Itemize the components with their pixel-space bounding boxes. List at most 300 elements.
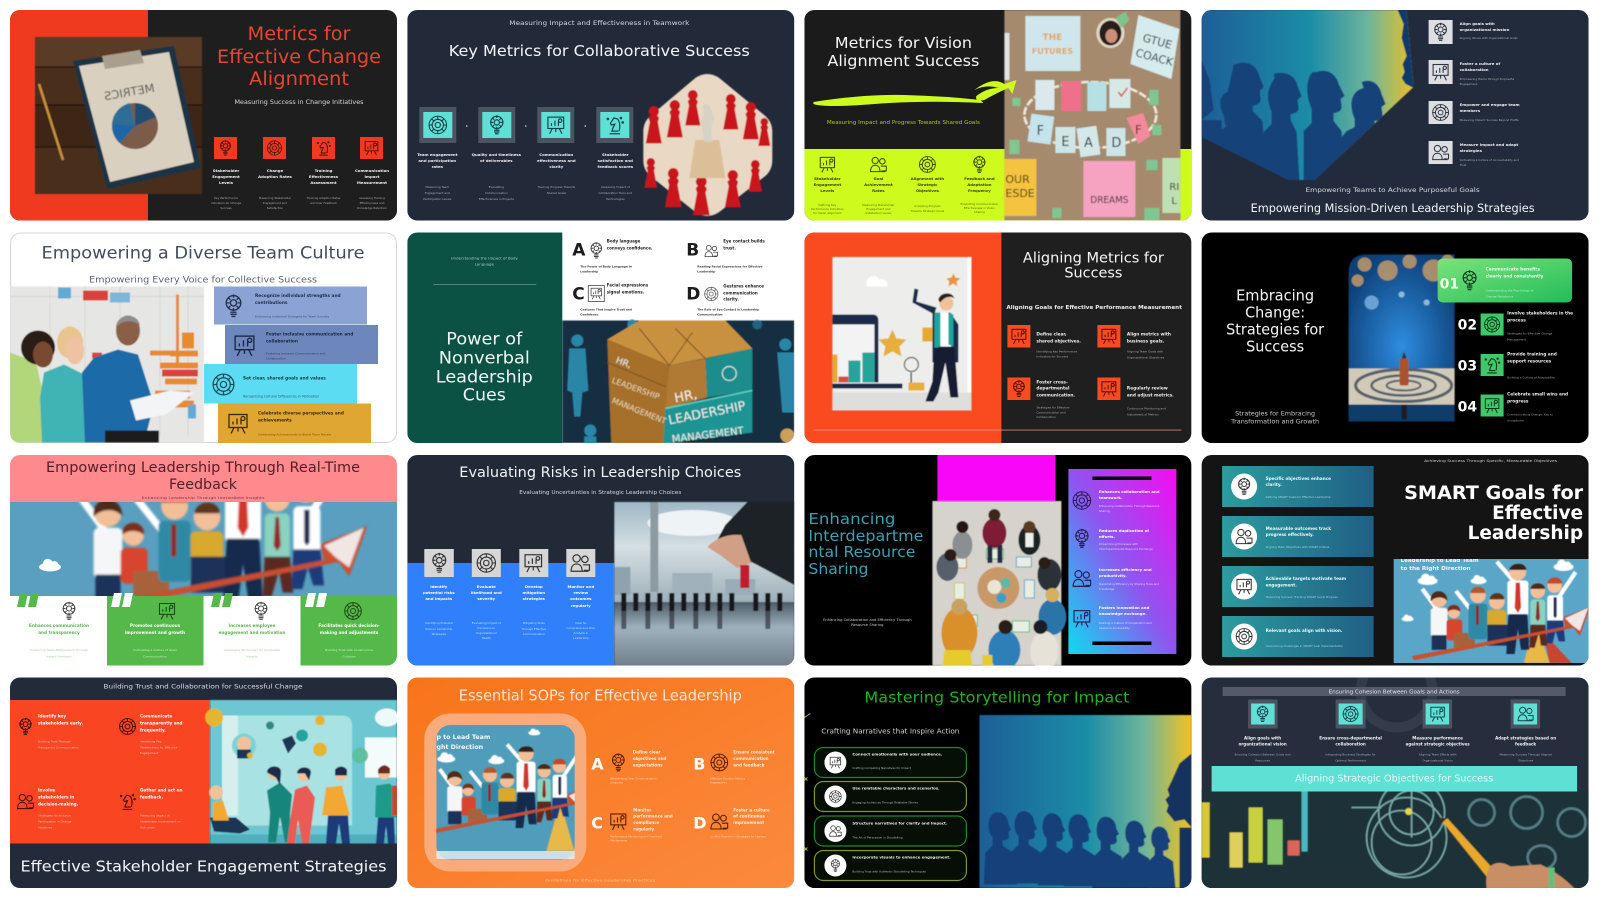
metric labels: Feedback and — [964, 176, 995, 181]
framed illustration: ight Direction — [434, 744, 483, 751]
step 04: Acceptance — [1507, 418, 1524, 422]
SOP C — [591, 808, 673, 842]
framed illustration: ip to Lead Team — [434, 734, 491, 741]
title — [437, 332, 532, 400]
step 04: 04 — [1458, 400, 1477, 416]
item headings: members — [1460, 108, 1481, 113]
step descriptions: Risks in Leadership — [425, 627, 452, 631]
step: communication — [225, 325, 378, 364]
step: strengths: Recognize individual strengths and — [255, 293, 341, 299]
SOP B: Frameworks — [710, 780, 727, 784]
gradient panel with benefits: Enhances collaboration and — [1099, 489, 1160, 494]
feedback column 3 — [204, 593, 300, 666]
goal card: achievable: Achievable targets motivate team — [1266, 576, 1347, 581]
panel: Effective Stakeholder Engagement Strategies — [10, 678, 399, 888]
icon tiles — [424, 549, 595, 577]
title: Effective Change — [217, 47, 381, 68]
gradient panel with benefits: knowledge exchange. — [1099, 611, 1147, 616]
metric icons — [419, 107, 633, 143]
step 02: 02 — [1458, 318, 1477, 334]
metric descriptions: Engagement and — [263, 201, 287, 205]
photo: HR leadership cubes: MANAGEMENT — [671, 426, 745, 445]
story pill 1: Crafting Compelling Narratives for Impact — [852, 766, 912, 770]
feedback column 3: Increases employee — [229, 623, 276, 628]
panel: Empowering Leadership Through Real-Time Feedback — [10, 449, 398, 666]
metric labels: Impact — [364, 174, 380, 179]
step descriptions: Organizational — [476, 631, 497, 635]
title: Power of — [446, 330, 523, 350]
gradient panel with benefits: Maximizing Efficiency by Sharing Tools and — [1099, 582, 1159, 586]
objective labels: against strategic objectives — [1405, 742, 1470, 746]
item: review metrics: and adjust metrics. — [1127, 392, 1174, 398]
SOP D: Conflict Resolution Strategies for Leaders — [710, 834, 767, 838]
metric icons — [820, 156, 985, 172]
metric descriptions: Technologies — [605, 197, 625, 201]
metric descriptions: Assessing Impact of — [601, 185, 631, 189]
title: Success — [1064, 266, 1122, 282]
subheading: Aligning Goals for Effective Performance Measurement — [1006, 305, 1183, 311]
step: shared goals: Recognizing Cultural Differences in Motivation — [243, 394, 319, 398]
step 04: Communicating Change: Key to — [1507, 412, 1553, 416]
title: Essential SOPs for Effective Leadership — [459, 686, 742, 704]
metric labels: Objectives — [916, 188, 940, 193]
SOP D: D — [693, 814, 707, 832]
metric descriptions: Key Performance — [214, 196, 238, 200]
metric labels: Frequency — [968, 188, 991, 193]
step descriptions: Comprehensive Risk — [567, 626, 595, 630]
panel: Key Metrics for Collaborative Success — [407, 10, 794, 220]
title — [46, 460, 360, 493]
subtitle bar — [1223, 687, 1566, 696]
item: review metrics: Regularly review — [1127, 386, 1168, 392]
item B: Reading Facial Expressions for Effective — [697, 264, 762, 268]
step labels: potential risks — [423, 590, 455, 595]
step labels — [423, 584, 594, 608]
objective descriptions: Optimal Performance — [1335, 758, 1366, 762]
item B — [686, 238, 765, 274]
step descriptions — [425, 621, 595, 640]
SOP C: compliance — [633, 820, 660, 825]
step 02 — [1458, 310, 1573, 342]
metric descriptions: Measuring Stakeholder — [259, 196, 292, 200]
gradient panel with benefits: Streamlining Processes with — [1099, 542, 1138, 546]
gradient panel with benefits: Resource Accessibility — [1099, 626, 1130, 630]
story pill 4 — [814, 850, 966, 880]
photo: cork board with sticky notes: COACK — [1134, 46, 1175, 69]
panel: Mastering Storytelling for Impact — [804, 678, 1192, 888]
item: cross-departmental: Collaboration — [1036, 415, 1056, 419]
metric descriptions: and User Feedback — [310, 201, 337, 205]
objective labels: collaboration — [1335, 742, 1366, 746]
title: Alignment — [249, 69, 349, 90]
item C — [572, 282, 649, 316]
metric labels: Goal — [873, 176, 883, 181]
item headings: Empower and engage team — [1460, 102, 1520, 107]
metric labels: Stakeholder — [213, 168, 239, 173]
photo: cork board with sticky notes: FUTURES — [1032, 47, 1073, 56]
metric descriptions: Towards Strategic Goals — [910, 209, 945, 213]
metric labels: and participation — [418, 158, 456, 163]
title — [828, 36, 979, 69]
metric labels: rates — [432, 164, 444, 169]
item: cross-departmental — [1007, 378, 1075, 419]
item: involve stakeholders: Participation in Change — [38, 820, 72, 824]
metric descriptions: for Vision Alignment — [813, 211, 842, 215]
title: Strategies for — [1226, 320, 1325, 338]
SOP C: Performance Monitoring and Feedback — [610, 834, 663, 838]
story pill 1: Connect emotionally with your audience. — [852, 752, 943, 756]
objective labels: Align goals with — [1244, 736, 1281, 740]
subtitle: Evaluating Uncertainties in Strategic Leadership Choices — [519, 490, 682, 496]
feedback column 4: making and adjustments — [320, 630, 379, 635]
subtitle: Resource Sharing — [851, 623, 884, 627]
photo: HR leadership cubes: LEADERSHIP — [667, 398, 747, 427]
photo: three colleagues at a planning wall — [10, 286, 204, 442]
metric descriptions: Analyzing Progress — [914, 204, 941, 208]
subtitle: Measuring Impact and Progress Towards Shared Goals — [827, 120, 980, 126]
story pill 2: Engaging Audiences Through Relatable Stories — [852, 800, 918, 804]
step 01 highlight: Communicate benefits — [1486, 266, 1540, 272]
SOP A: Define clear — [633, 750, 661, 754]
step: communication: Collaboration — [266, 356, 286, 360]
story pill 2 — [814, 782, 966, 812]
metric labels: Engagement — [814, 182, 841, 187]
goal card: specific — [1222, 466, 1374, 507]
title: Leadership — [1468, 523, 1583, 544]
step labels: regularly — [571, 603, 591, 608]
item C: Gestures That Inspire Trust and — [580, 308, 632, 312]
metric labels: Adoption Rates — [258, 174, 293, 179]
step descriptions: Identifying Potential — [425, 621, 453, 625]
feedback column 2: Promotes continuous — [130, 623, 181, 628]
step descriptions: Analysis in — [573, 631, 589, 635]
feedback column 3: Leveraging Technology for Immediate — [224, 648, 280, 652]
story pill 4: Incorporate visuals to enhance engagement. — [852, 854, 951, 860]
photo: HR leadership cubes — [562, 320, 794, 445]
photo: HR leadership cubes: LEADERSHIP — [611, 376, 661, 402]
item: gather feedback: feedback. — [140, 794, 164, 800]
step labels: Evaluate — [477, 584, 496, 589]
story pill 3 — [814, 816, 966, 846]
metric descriptions: Collaboration Tools and — [598, 191, 632, 195]
title: Aligning Metrics for — [1023, 250, 1164, 266]
subtitle: Strategies for Embracing — [1235, 412, 1315, 418]
item: shared objectives: Identifying Key Performance — [1036, 350, 1077, 354]
SOP A: Establishing Clear Communication — [610, 776, 657, 780]
title: Empowering a Diverse Team Culture — [42, 244, 364, 264]
objective descriptions: Resources — [1255, 758, 1270, 762]
subtitle — [823, 618, 912, 627]
metric labels — [417, 154, 633, 168]
title: Mastering Storytelling for Impact — [864, 688, 1130, 706]
panel: Metrics for Effective Change Alignment — [10, 10, 397, 220]
goal card: relevant: Overcoming Challenges in SMART Goal Implementation — [1266, 644, 1343, 648]
item A: conveys confidence. — [607, 246, 653, 250]
SOP C: performance and — [633, 814, 673, 818]
metric descriptions: Effectiveness in Projects — [479, 197, 514, 201]
panel: Empowering a Diverse Team Culture — [10, 232, 397, 443]
step labels: and impacts — [425, 596, 453, 601]
objective descriptions: Aligning Team Efforts with — [1419, 752, 1457, 756]
metric labels: Rates — [872, 188, 885, 193]
step 03: Provide training and — [1507, 352, 1557, 358]
step 04 — [1458, 392, 1568, 422]
framed illustration — [424, 714, 592, 872]
objective labels: Ensure cross-departmental — [1319, 736, 1382, 740]
step 03: 03 — [1458, 358, 1477, 374]
title: ntal Resource — [808, 543, 915, 561]
gradient panel with benefits: Sharing — [1099, 509, 1110, 513]
gradient panel with benefits: Enhancing Collaboration Through Resource — [1099, 504, 1160, 508]
story pill 3: Structure narratives for clarity and impact. — [852, 820, 948, 826]
panel: Power of Nonverbal Leadership Cues — [407, 232, 794, 445]
goal card: specific: Defining SMART Goals for Effective Leadership — [1266, 495, 1331, 499]
subtitle: Empowering Teams to Achieve Purposeful Goals — [1306, 186, 1480, 194]
title: Effective Stakeholder Engagement Strategies — [20, 858, 386, 876]
item: identify stakeholders: Identify key — [38, 714, 66, 718]
item C: Confidence — [580, 312, 598, 316]
panel: Aligning Strategic Objectives for Success — [1202, 656, 1589, 888]
subtitle: Enhancing Collaboration and Efficiency Through — [823, 618, 912, 622]
photo: cork board with sticky notes: THE — [1042, 33, 1062, 43]
gradient panel with benefits: Knowledge — [1099, 587, 1115, 591]
metric descriptions: Effectiveness and — [360, 201, 385, 205]
subtitle bar: Ensuring Cohesion Between Goals and Actions — [1329, 690, 1460, 696]
story pill 2: Use relatable characters and scenarios. — [852, 786, 940, 790]
SOP C: Mechanisms — [610, 838, 628, 842]
step: strengths: Embracing Individual Strengths for Team Success — [255, 314, 330, 318]
SOP C: C — [591, 814, 603, 832]
item: cross-departmental: Strategies for Effective — [1036, 406, 1070, 410]
metric descriptions: Satisfaction Levels — [865, 211, 892, 215]
metric labels: feedback scores — [598, 164, 634, 169]
metric labels: Alignment with — [911, 176, 944, 181]
item: business goals — [1097, 325, 1171, 360]
subtitle: Building Trust and Collaboration for Successful Change — [104, 682, 302, 690]
panel: Empowering Mission-Driven Leadership Strategies — [1202, 10, 1589, 220]
metric labels: Levels — [820, 188, 835, 193]
objective labels: feedback — [1515, 742, 1536, 746]
item headings — [1460, 21, 1520, 153]
metric descriptions — [211, 197, 387, 210]
objective labels — [1238, 736, 1556, 746]
metric descriptions: Performance Indicators — [811, 207, 844, 211]
subtitle — [451, 257, 518, 266]
title: Metrics for Vision — [835, 34, 972, 52]
item B: trust. — [723, 246, 736, 250]
step 03: support resources — [1507, 358, 1552, 364]
metric labels — [212, 170, 389, 184]
objective descriptions: Ensuring Cohesion Between Goals and — [1235, 752, 1291, 756]
metric labels: Achievement — [864, 182, 893, 187]
metric labels: Team engagement — [417, 152, 458, 157]
step: shared goals — [204, 364, 357, 404]
item: cross-departmental: communication. — [1036, 392, 1075, 398]
goal card: measurable — [1222, 516, 1374, 557]
metric descriptions: Assessing Training — [359, 196, 385, 200]
item: business goals: business goals. — [1127, 338, 1165, 344]
step labels: severity — [477, 596, 496, 601]
title: Cues — [463, 386, 506, 406]
photo: cork board with sticky notes — [1004, 10, 1180, 220]
step labels: strategies — [523, 596, 546, 601]
step 04: progress — [1507, 398, 1529, 404]
gradient panel with benefits: teamwork. — [1099, 495, 1123, 500]
item: communicate transparently: Communicate — [140, 714, 172, 718]
step 03: Building a Culture of Adaptability — [1507, 376, 1555, 380]
illustration: handshake between colleagues — [205, 700, 399, 844]
title — [1023, 250, 1164, 282]
step: celebrate: achievements — [258, 418, 292, 424]
feedback column 2 — [107, 593, 204, 666]
item D: communication — [723, 290, 758, 296]
photo: red pawns around a figure — [643, 74, 772, 216]
item descriptions: Measuring Impact: Success Beyond Profits — [1460, 118, 1519, 122]
SOP A: expectations — [633, 762, 663, 768]
metric labels — [814, 178, 994, 192]
step 01 highlight — [1438, 258, 1572, 302]
subheading: Crafting Narratives that Inspire Action — [821, 728, 959, 736]
step 02: Strategies for Effective Change — [1507, 332, 1552, 336]
feedback column 2: Cultivating a Culture of Open — [133, 648, 177, 652]
subtitle — [1230, 412, 1319, 426]
gradient panel with benefits — [1068, 469, 1176, 654]
panel: SMART Goals for Effective Leadership — [1202, 455, 1590, 666]
item: cross-departmental: Foster cross- — [1036, 380, 1068, 386]
item: review metrics — [1097, 378, 1174, 416]
metric labels: Communication — [355, 168, 389, 173]
step: communication: Foster inclusive communication and — [266, 332, 353, 338]
objective descriptions: Objectives — [1518, 758, 1534, 762]
step labels: mitigation — [522, 590, 545, 595]
metric labels: Stakeholder — [814, 176, 841, 181]
goal card: achievable: Measuring Success: Tracking SMART Goals Progress — [1266, 595, 1338, 599]
title: Interdepartme — [808, 527, 923, 545]
title: Empowering Mission-Driven Leadership Strategies — [1251, 201, 1535, 215]
objective descriptions: Measuring Success Through Aligned — [1499, 752, 1552, 756]
step descriptions: Communication — [523, 632, 545, 636]
photo: HR leadership cubes: HR, — [673, 387, 699, 406]
title band: Aligning Strategic Objectives for Success — [1295, 774, 1493, 784]
panel: Essential SOPs for Effective Leadership — [407, 678, 794, 888]
title: Empowering Leadership Through Real-Time — [46, 460, 360, 476]
metric descriptions — [811, 203, 998, 214]
item icons — [1429, 20, 1453, 164]
photo: HR leadership cubes: MANAGEMENT — [611, 396, 668, 426]
photo: cork board with sticky notes: DREAMS — [1090, 195, 1128, 206]
item descriptions — [1459, 36, 1519, 167]
item A: A — [572, 240, 586, 260]
item descriptions: Trust — [1459, 163, 1467, 167]
step 01 highlight: 01 — [1440, 276, 1459, 292]
item: identify stakeholders: stakeholders early. — [38, 720, 83, 726]
photo: chalkboard with pencil — [1202, 778, 1589, 888]
step descriptions: Evaluating Impact of — [472, 621, 502, 625]
SOP B: communication — [733, 756, 769, 761]
step descriptions: Mitigating Risks — [523, 621, 545, 625]
metric descriptions: Effectiveness in Vision — [964, 206, 995, 210]
objective labels: Adapt strategies based on — [1495, 736, 1556, 740]
photo: cork board with sticky notes: F — [1135, 123, 1142, 137]
title — [1404, 483, 1584, 544]
metric labels: Levels — [219, 180, 234, 185]
metric descriptions: Communication — [485, 191, 508, 195]
step labels: outcomes — [570, 596, 592, 601]
metric descriptions: Knowledge Retention — [357, 206, 387, 210]
illustration: team on rising arrow: Leadership to Lead Team — [1401, 558, 1479, 564]
item: involve stakeholders: stakeholders in — [38, 794, 74, 800]
step descriptions: Leadership — [573, 636, 589, 640]
illustration: team on rising arrow — [10, 502, 397, 596]
metric labels: Assessment — [310, 180, 337, 185]
SOP D — [693, 808, 770, 838]
gradient panel with benefits: Building a Culture of Cooperation and — [1099, 621, 1152, 625]
step: celebrate: Celebrate diverse perspectives and — [258, 410, 344, 416]
metric descriptions: Participation Levels — [423, 197, 452, 201]
item: gather feedback: Outcomes — [140, 826, 155, 830]
step labels: Identify — [430, 584, 448, 589]
title: Metrics for — [248, 24, 351, 45]
illustration: team on rising arrow: to the Right Direction — [1401, 566, 1471, 572]
photo: hand placing figure on skyline — [614, 502, 794, 666]
photo: target and bokeh — [1349, 254, 1455, 422]
metric descriptions: Defining Key — [819, 203, 837, 207]
illustration: man with chart and laptop — [832, 257, 971, 410]
SOP C: regularly — [633, 826, 655, 832]
item: communicate transparently: transparently and — [140, 720, 183, 726]
item headings: Foster a culture of — [1460, 61, 1500, 66]
item: involve stakeholders — [18, 788, 79, 830]
feedback column 3: engagement and motivation — [219, 630, 285, 635]
photo: cork board with sticky notes: F — [1037, 124, 1044, 139]
item A: Body language — [607, 238, 641, 244]
SOP B: and feedback — [733, 762, 765, 768]
footer subtitle: Guidelines for Effective Leadership Practices — [545, 878, 655, 882]
item descriptions: Engagement — [1460, 82, 1478, 86]
gradient panel with benefits: Fosters innovation and — [1099, 605, 1150, 610]
objective descriptions: Organizational Vision — [1422, 758, 1453, 762]
photo: HR leadership cubes: HR, — [614, 356, 633, 371]
metric descriptions: Engagement and — [425, 191, 450, 195]
metric labels: Effectiveness — [309, 174, 339, 179]
panel: Aligning Metrics for Success — [804, 232, 1191, 443]
step: celebrate: Celebrating Achievements to Boost Team Morale — [258, 432, 331, 436]
brush stroke and arrow — [813, 80, 1016, 106]
item: review metrics: Adjustment of Metrics — [1127, 412, 1159, 416]
item: business goals: Organizational Objectives — [1127, 356, 1165, 360]
title: Success — [1246, 338, 1304, 356]
item: communicate transparently — [120, 714, 183, 755]
title band — [1212, 766, 1577, 792]
metric labels: Strategic — [917, 182, 938, 187]
goal card: specific: Specific objectives enhance — [1266, 476, 1331, 481]
item headings: organizational mission — [1460, 27, 1510, 32]
metric descriptions: Shared Goals — [547, 191, 566, 195]
feedback column 1: Enhancing Team Performance Through — [30, 648, 88, 652]
SOP A: Channels — [610, 780, 623, 784]
item: business goals: Aligning Team Goals with — [1127, 350, 1163, 354]
illustration: crowd silhouettes and speaker — [979, 715, 1192, 888]
step 04: Celebrate small wins and — [1507, 392, 1568, 398]
step 02: Management — [1507, 338, 1527, 342]
step 01 highlight: clearly and consistently — [1486, 274, 1544, 280]
metric labels: Training — [315, 168, 333, 173]
step labels: Develop — [525, 584, 543, 589]
metric descriptions: Evaluating — [489, 185, 504, 189]
objective labels: organizational vision — [1238, 742, 1287, 746]
item: communicate transparently: Stakeholders for Effective — [140, 746, 177, 750]
step: celebrate — [218, 404, 371, 443]
